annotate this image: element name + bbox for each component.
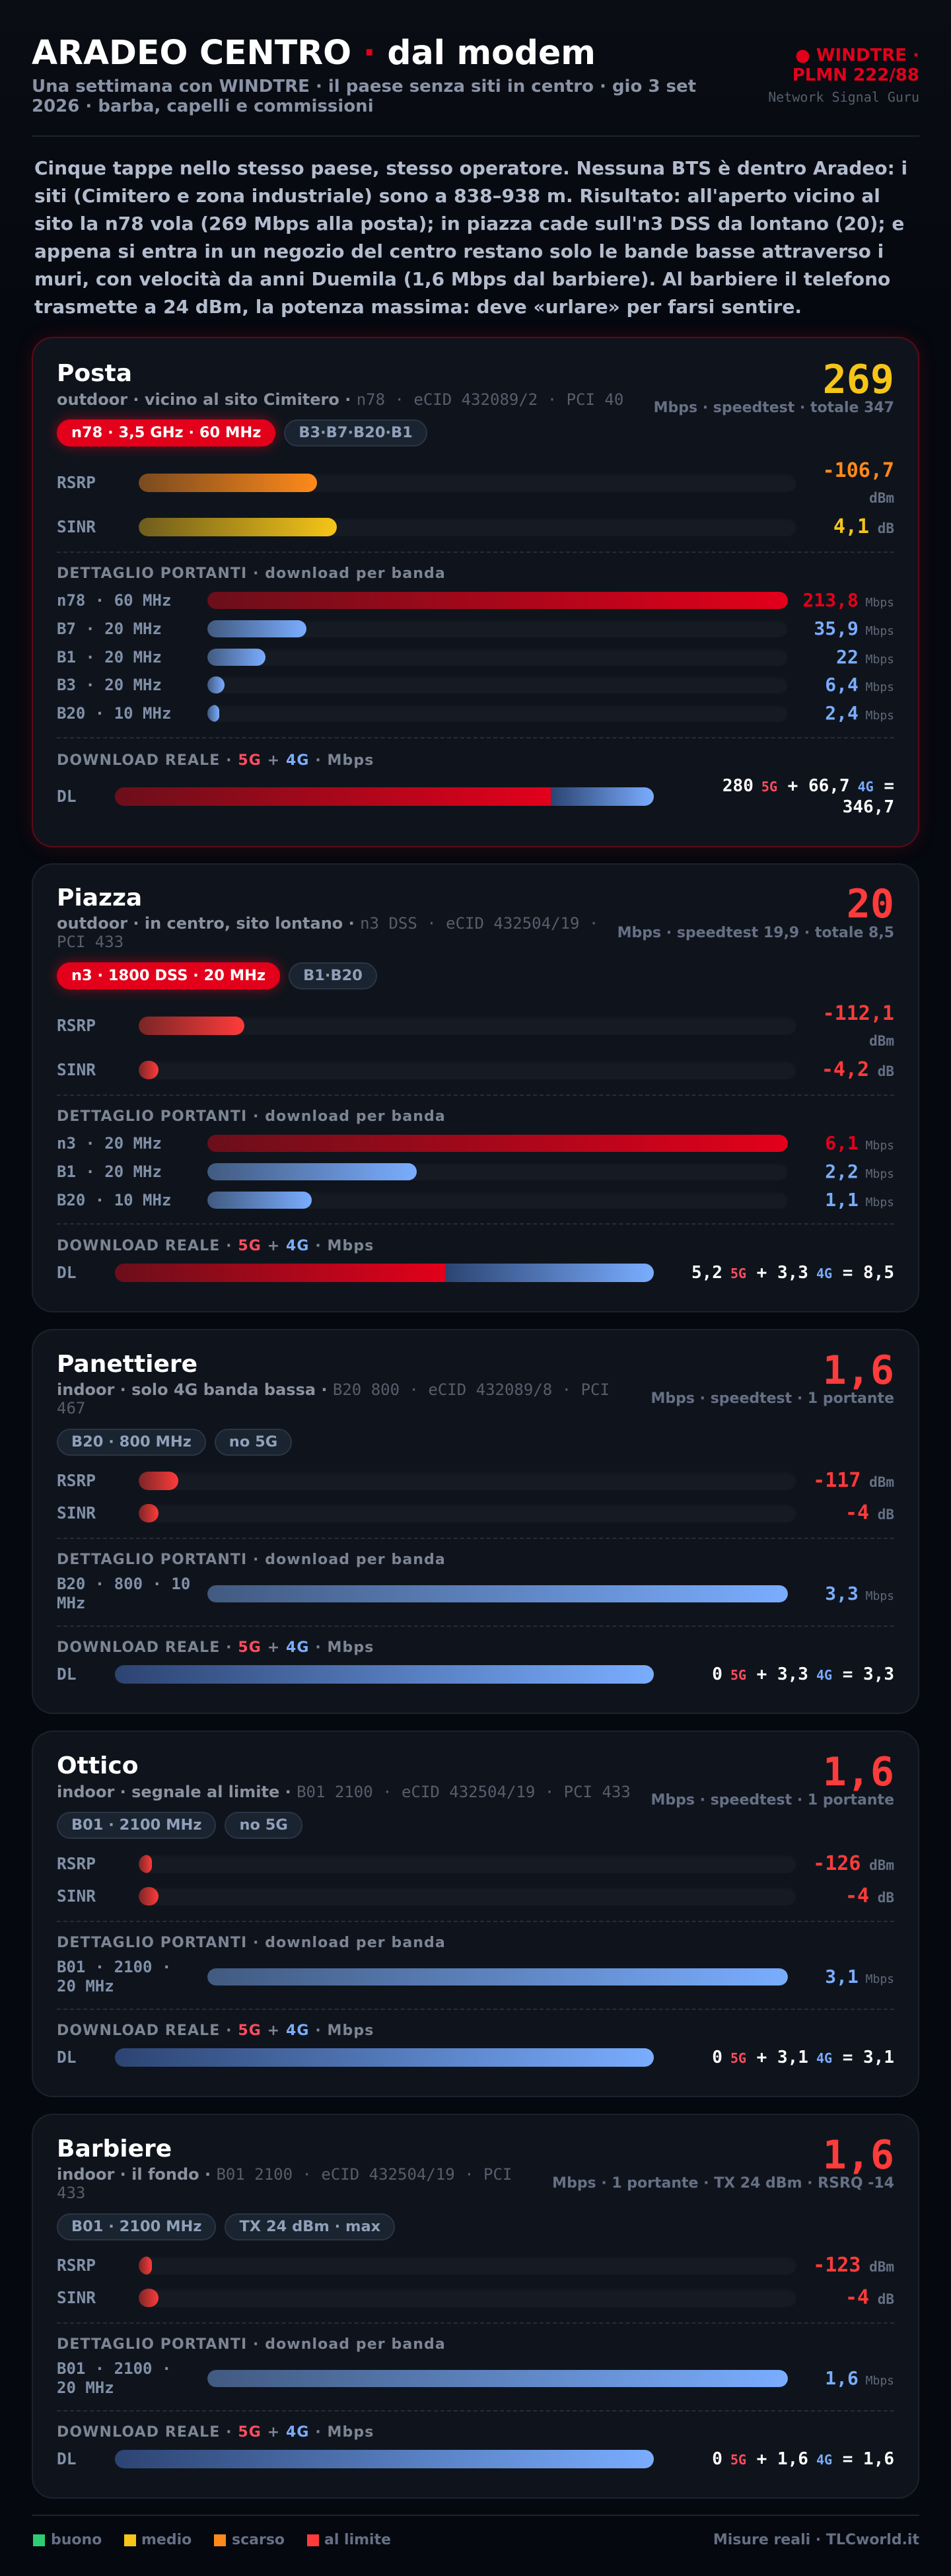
speed caption: Mbps · speedtest · 1 portante [651, 1390, 894, 1407]
panel: Barbiere: 20 MHz [57, 2379, 114, 2397]
speed caption: Mbps · speedtest 19,9 · totale 8,5 [617, 925, 894, 941]
RSRP meter [57, 1469, 894, 1492]
download stacked bar [57, 2450, 894, 2468]
carrier bar B1: 22 Mbps [836, 646, 894, 667]
carrier bar n3: 6,1 Mbps [825, 1132, 894, 1154]
carrier bar B1: B1 · 20 MHz [57, 1163, 162, 1181]
band chips: no 5G [229, 1433, 277, 1450]
carrier bar B20 [57, 1189, 894, 1211]
RSRP meter [57, 1852, 894, 1875]
legend: medio: medio [141, 2532, 192, 2548]
band chips: n78 · 3,5 GHz · 60 MHz [71, 424, 261, 441]
SINR meter: -4,2 dB [822, 1058, 894, 1081]
band chips [57, 1812, 302, 1839]
panel: Posta: -106,7 [823, 459, 894, 482]
SINR meter [57, 515, 894, 538]
band chips: no 5G [239, 1816, 288, 1834]
RSRP meter: -123 dBm [813, 2254, 894, 2277]
carrier bar B7: B7 · 20 MHz [57, 620, 162, 638]
operator badge [792, 46, 919, 85]
SINR meter [57, 1501, 894, 1524]
band chips [57, 2213, 395, 2240]
carrier bar B7 [57, 618, 894, 639]
carrier section heading: DETTAGLIO PORTANTI · download per banda [57, 1108, 446, 1124]
download stacked bar: DL [57, 2449, 77, 2468]
carrier bar n78: 213,8 Mbps [803, 589, 894, 611]
carrier section heading: DETTAGLIO PORTANTI · download per banda [57, 1934, 446, 1951]
band chips: B3·B7·B20·B1 [299, 424, 413, 441]
panel: Piazza: dBm [869, 1033, 894, 1049]
download stacked bar: 0 5G + 1,6 4G = 1,6 [712, 2449, 894, 2469]
band chips: B20 · 800 MHz [71, 1433, 192, 1450]
panel: Posta: 346,7 [843, 797, 894, 817]
header rule [32, 135, 919, 137]
band chips: B01 · 2100 MHz [71, 1816, 201, 1834]
subtitle [32, 77, 696, 116]
carrier bar B20: 2,4 Mbps [825, 702, 894, 724]
download stacked bar: 0 5G + 3,3 4G = 3,3 [712, 1664, 894, 1684]
RSRP meter: RSRP [57, 2256, 96, 2275]
legend: buono [32, 2534, 101, 2546]
stop name: Panettiere [57, 1351, 197, 1378]
carrier bar B01 [57, 2370, 894, 2387]
SINR meter: SINR [57, 1503, 96, 1522]
carrier bar B20: B20 · 10 MHz [57, 1191, 171, 1209]
stop name: Barbiere [57, 2135, 172, 2163]
SINR meter: 4,1 dB [833, 515, 894, 538]
download stacked bar [57, 1664, 894, 1684]
subtitle: Una settimana con WINDTRE · il paese senza siti in centro · gio 3 set [32, 77, 696, 96]
SINR meter [57, 1058, 894, 1081]
carrier bar n78 [57, 589, 894, 611]
panel: Piazza: -112,1 [823, 1002, 894, 1025]
header [32, 33, 919, 116]
speed value: 269 [823, 357, 894, 403]
footer rule [32, 2515, 919, 2516]
RSRP meter [57, 1002, 894, 1049]
download stacked bar: DL [57, 1664, 77, 1684]
download stacked bar: DL [57, 1263, 77, 1282]
SINR meter: -4 dB [845, 2286, 894, 2309]
panel: Panettiere: MHz [57, 1594, 85, 1612]
intro paragraph: sito la n78 vola (269 Mbps alla posta); in piazza cade sull'n3 DSS da lontano (20); e [34, 213, 904, 234]
carrier bar B20 [57, 702, 894, 724]
download section heading: DOWNLOAD REALE · 5G + 4G · Mbps [57, 1639, 374, 1656]
title: ARADEO CENTRO · dal modem [32, 33, 596, 72]
speed value: 20 [847, 881, 894, 927]
panel: Panettiere [32, 1329, 919, 1714]
RSRP meter: RSRP [57, 473, 96, 492]
carrier bar B01: 1,6 Mbps [825, 2367, 894, 2389]
carrier bar B3 [57, 674, 894, 696]
carrier bar n3: n3 · 20 MHz [57, 1134, 162, 1153]
carrier bar B7: 35,9 Mbps [814, 618, 894, 639]
download stacked bar [57, 776, 894, 817]
stop name: Piazza [57, 884, 142, 912]
speed caption: Mbps · 1 portante · TX 24 dBm · RSRQ -14 [552, 2174, 894, 2192]
RSRP meter: -117 dBm [813, 1469, 894, 1492]
carrier bar B01 [57, 1958, 894, 1995]
carrier section heading: DETTAGLIO PORTANTI · download per banda [57, 2336, 446, 2353]
band chips: TX 24 dBm · max [239, 2218, 380, 2235]
carrier bar B20: 1,1 Mbps [825, 1189, 894, 1211]
panel: Barbiere: B01 · 2100 · [57, 2359, 171, 2378]
band chips [57, 1429, 292, 1456]
download stacked bar [57, 2048, 894, 2067]
legend: al limite: al limite [324, 2532, 391, 2548]
speed value: 1,6 [823, 1347, 894, 1394]
speed caption: Mbps · speedtest · totale 347 [654, 399, 894, 416]
RSRP meter: RSRP [57, 1471, 96, 1490]
stop description: PCI 433 [57, 933, 123, 951]
footer credit: Misure reali · TLCworld.it [713, 2532, 919, 2548]
SINR meter: -4 dB [845, 1501, 894, 1524]
RSRP meter [57, 2256, 894, 2275]
panel: Barbiere [32, 2114, 919, 2499]
source credit: Network Signal Guru [768, 89, 919, 105]
RSRP meter [57, 459, 894, 506]
band chips [50, 954, 377, 997]
RSRP meter: -126 dBm [813, 1852, 894, 1875]
download section heading: DOWNLOAD REALE · 5G + 4G · Mbps [57, 2022, 374, 2039]
legend [32, 2534, 375, 2546]
carrier bar B20: B20 · 10 MHz [57, 704, 171, 723]
intro paragraph: Cinque tappe nello stesso paese, stesso operatore. Nessuna BTS è dentro Aradeo: i [34, 157, 907, 179]
download section heading: DOWNLOAD REALE · 5G + 4G · Mbps [57, 1238, 374, 1254]
download stacked bar: 0 5G + 3,1 4G = 3,1 [712, 2048, 894, 2067]
carrier section heading: DETTAGLIO PORTANTI · download per banda [57, 565, 446, 582]
carrier bar B1 [57, 1161, 894, 1182]
stop description: outdoor · vicino al sito Cimitero · n78 · eCID 432089/2 · PCI 40 [57, 390, 623, 409]
carrier bar B1 [57, 646, 894, 667]
carrier bar B3: B3 · 20 MHz [57, 676, 162, 694]
panel: Panettiere: B20 · 800 · 10 [57, 1575, 190, 1593]
RSRP meter: RSRP [57, 1016, 96, 1035]
SINR meter: -4 dB [845, 1884, 894, 1908]
stop description [57, 1380, 610, 1417]
intro paragraph: siti (Cimitero e zona industriale) sono a 838–938 m. Risultato: all'aperto vicino al [34, 185, 880, 207]
panel: Posta: dBm [869, 490, 894, 506]
stop description [57, 914, 598, 951]
stop description: indoor · il fondo · B01 2100 · eCID 432504/19 · PCI [57, 2165, 512, 2184]
intro paragraph [34, 157, 907, 318]
RSRP meter: RSRP [57, 1854, 96, 1873]
download section heading: DOWNLOAD REALE · 5G + 4G · Mbps [57, 2424, 374, 2441]
legend: al limite [307, 2534, 386, 2546]
carrier bar B01: 3,1 Mbps [825, 1966, 894, 1987]
intro paragraph: muri, con velocità da anni Duemila (1,6 Mbps dal barbiere). Al barbiere il telefono [34, 268, 890, 290]
legend: buono: buono [51, 2532, 102, 2548]
panel: Posta: 280 5G + 66,7 4G = [722, 776, 894, 796]
stop name: Ottico [57, 1752, 138, 1779]
intro paragraph: trasmette a 24 dBm, la potenza massima: deve «urlare» per farsi sentire. [34, 296, 802, 318]
carrier bar B20: 3,3 Mbps [825, 1583, 894, 1604]
SINR meter: SINR [57, 1886, 96, 1906]
legend: scarso: scarso [232, 2532, 285, 2548]
band chips [50, 411, 427, 454]
speed value: 1,6 [823, 2132, 894, 2178]
SINR meter [57, 2289, 894, 2307]
SINR meter: SINR [57, 2288, 96, 2307]
download section heading: DOWNLOAD REALE · 5G + 4G · Mbps [57, 752, 374, 769]
panel: Posta [32, 337, 919, 847]
stop description: indoor · solo 4G banda bassa · B20 800 · eCID 432089/8 · PCI [57, 1380, 610, 1399]
intro paragraph: appena si entra in un negozio del centro restano solo le bande basse attraverso i [34, 240, 884, 262]
download stacked bar: DL [57, 2048, 77, 2067]
band chips: n3 · 1800 DSS · 20 MHz [71, 967, 265, 984]
carrier bar B3: 6,4 Mbps [825, 674, 894, 696]
stop description: 433 [57, 2184, 85, 2202]
SINR meter: SINR [57, 1060, 96, 1079]
carrier section heading: DETTAGLIO PORTANTI · download per banda [57, 1551, 446, 1568]
carrier bar n78: n78 · 60 MHz [57, 591, 171, 610]
SINR meter [57, 1884, 894, 1908]
stop description [57, 2165, 512, 2202]
carrier bar B1: B1 · 20 MHz [57, 647, 162, 666]
panel: Ottico [32, 1731, 919, 2097]
operator badge: ● WINDTRE · [795, 46, 919, 65]
legend: scarso [214, 2534, 287, 2546]
speed caption: Mbps · speedtest · 1 portante [651, 1791, 894, 1808]
stop description: indoor · segnale al limite · B01 2100 · eCID 432504/19 · PCI 433 [57, 1783, 631, 1801]
stop description: 467 [57, 1399, 85, 1417]
panel: Piazza [32, 863, 919, 1312]
carrier bar n3 [57, 1132, 894, 1154]
panel: Ottico: 20 MHz [57, 1977, 114, 1995]
download stacked bar [57, 1263, 894, 1283]
speed value: 1,6 [823, 1749, 894, 1795]
download stacked bar: DL [57, 787, 77, 806]
panel: Ottico: B01 · 2100 · [57, 1958, 171, 1976]
download stacked bar: 5,2 5G + 3,3 4G = 8,5 [691, 1263, 894, 1283]
legend: medio [124, 2534, 194, 2546]
operator badge: PLMN 222/88 [792, 65, 919, 85]
stop description: outdoor · in centro, sito lontano · n3 DSS · eCID 432504/19 · [57, 914, 598, 933]
stop name: Posta [57, 360, 132, 387]
subtitle: 2026 · barba, capelli e commissioni [32, 96, 374, 116]
SINR meter: SINR [57, 517, 96, 536]
band chips: B01 · 2100 MHz [71, 2218, 201, 2235]
band chips: B1·B20 [303, 967, 363, 984]
carrier bar B20 [57, 1575, 894, 1612]
carrier bar B1: 2,2 Mbps [825, 1161, 894, 1182]
